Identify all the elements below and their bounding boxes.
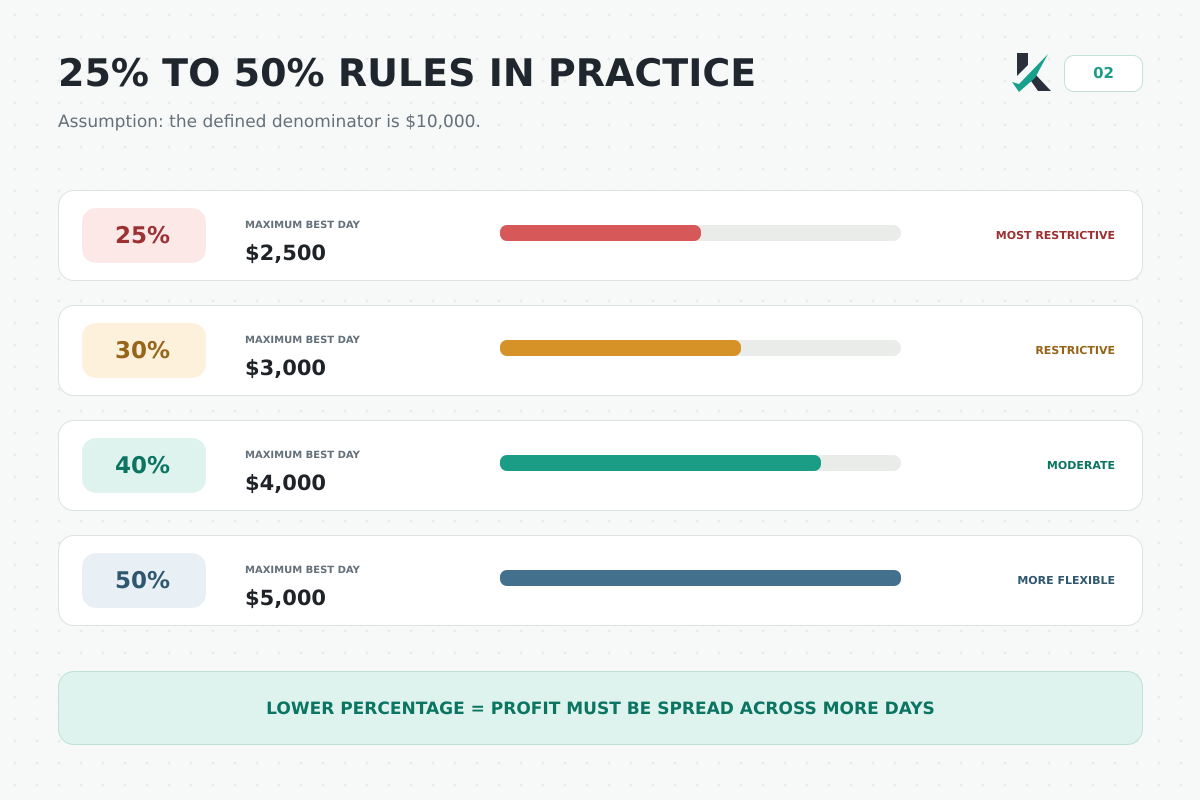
percentage chip: 40% (115, 453, 170, 479)
percentage chip (82, 208, 206, 263)
rating tag: RESTRICTIVE (1035, 344, 1115, 357)
label: MAXIMUM BEST DAY (245, 220, 360, 231)
label: MAXIMUM BEST DAY (245, 565, 360, 576)
panel: 30% rule (58, 305, 1143, 396)
subtitle: Assumption: the defined denominator is $10,000. (58, 112, 481, 132)
progress bar (500, 570, 901, 586)
value: $2,500 (245, 241, 326, 265)
label: MAXIMUM BEST DAY (245, 450, 360, 461)
value: $3,000 (245, 356, 326, 380)
progress bar (500, 455, 901, 471)
title: 25% TO 50% RULES IN PRACTICE (58, 51, 756, 95)
rating tag: MORE FLEXIBLE (1017, 574, 1115, 587)
rating tag: MOST RESTRICTIVE (996, 229, 1115, 242)
callout banner (58, 671, 1143, 745)
progress bar (500, 225, 901, 241)
progress bar (500, 340, 901, 356)
percentage chip (82, 323, 206, 378)
page number badge (1064, 55, 1143, 92)
value: $4,000 (245, 471, 326, 495)
panel: 25% rule (58, 190, 1143, 281)
percentage chip: 25% (115, 223, 170, 249)
rating tag: MODERATE (1047, 459, 1115, 472)
value: $5,000 (245, 586, 326, 610)
percentage chip: 30% (115, 338, 170, 364)
panel: 50% rule (58, 535, 1143, 626)
callout banner: LOWER PERCENTAGE = PROFIT MUST BE SPREAD ACROSS MORE DAYS (266, 699, 935, 719)
panel: 40% rule (58, 420, 1143, 511)
icon: logo K with checkmark (1012, 53, 1051, 92)
percentage chip (82, 438, 206, 493)
page number badge: 02 (1093, 64, 1114, 82)
percentage chip: 50% (115, 568, 170, 594)
percentage chip (82, 553, 206, 608)
label: MAXIMUM BEST DAY (245, 335, 360, 346)
